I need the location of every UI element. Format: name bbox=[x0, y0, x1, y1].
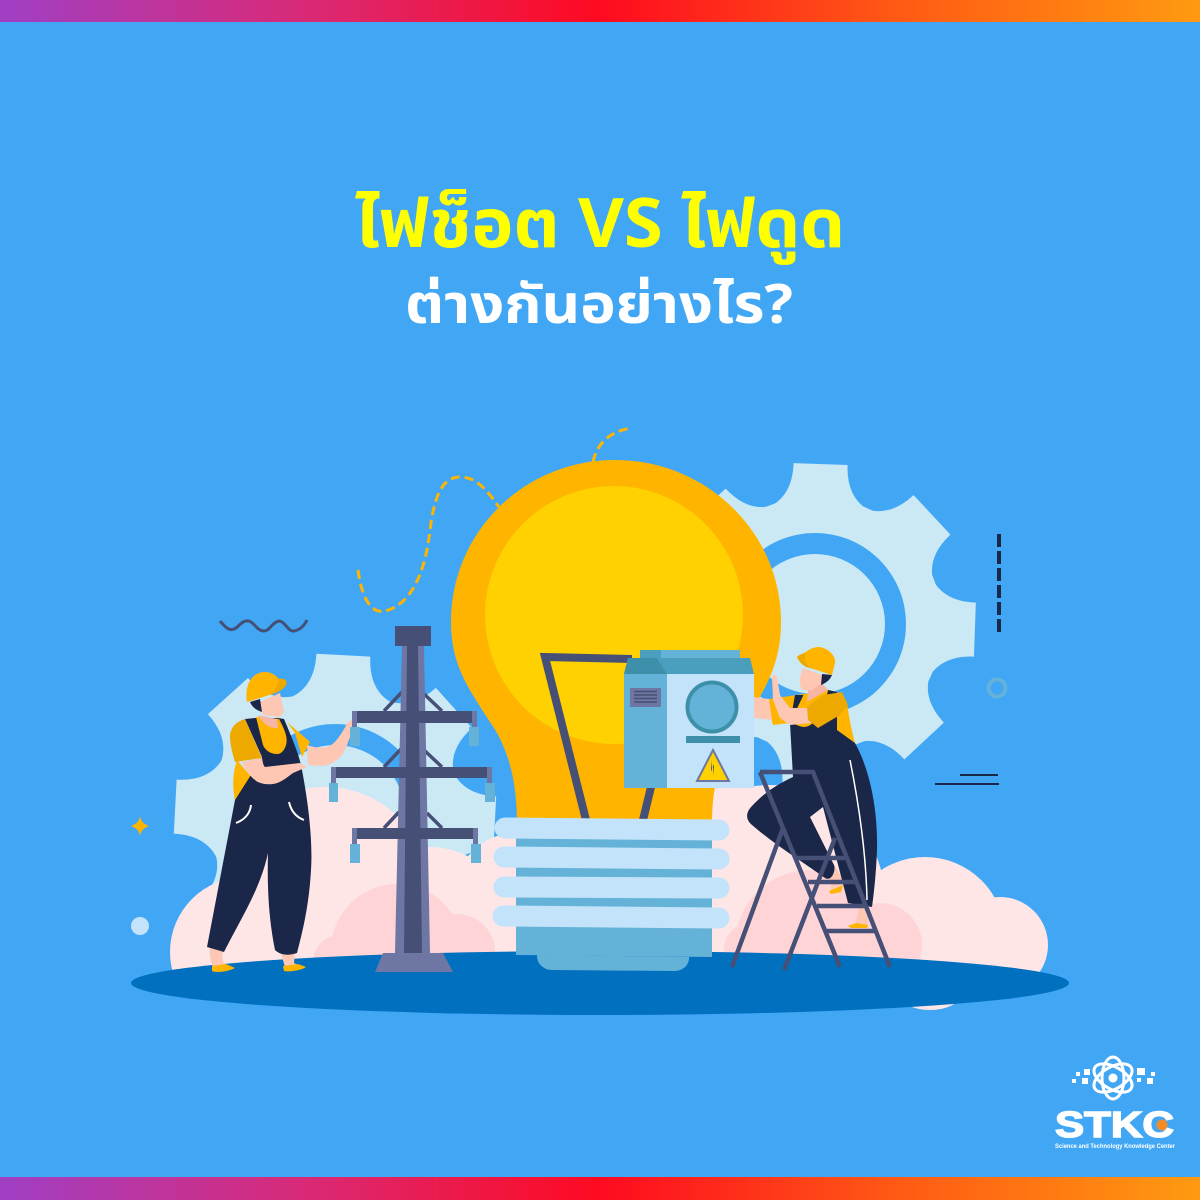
light bulb bbox=[451, 460, 781, 971]
clouds: darker pink bbox=[314, 870, 922, 960]
far arm bbox=[307, 720, 352, 766]
raised forearm bbox=[772, 675, 812, 725]
top gradient bar bbox=[0, 0, 1200, 22]
clouds: light pink bbox=[170, 785, 1048, 1027]
gear: right bbox=[653, 462, 977, 786]
dashed wire left bbox=[358, 477, 499, 611]
small ring bbox=[988, 680, 1006, 696]
sparkle bbox=[131, 816, 149, 836]
logo pixels bbox=[1072, 1068, 1155, 1084]
logo wordmark: STKC bbox=[1055, 1104, 1174, 1145]
electrical box bbox=[624, 650, 754, 788]
shirt chest bbox=[790, 691, 828, 727]
hard hat bbox=[797, 647, 835, 675]
sleeve bbox=[230, 719, 262, 762]
hair bbox=[821, 674, 832, 685]
face bbox=[260, 693, 284, 717]
near forearm bbox=[242, 758, 307, 784]
squiggle bbox=[220, 620, 307, 631]
pockets bbox=[236, 802, 304, 823]
filament bbox=[545, 657, 651, 820]
speed lines bbox=[935, 775, 999, 784]
shirt front bbox=[256, 717, 287, 754]
subtitle: ต่างกันอย่างไร? bbox=[405, 267, 793, 348]
logo tagline: Science and Technology Knowledge Center bbox=[1055, 1144, 1176, 1150]
hard hat bbox=[246, 672, 287, 702]
hair bbox=[250, 699, 262, 712]
legs skin bbox=[210, 945, 300, 967]
ground ellipse bbox=[131, 951, 1069, 1015]
worker left bbox=[207, 672, 352, 972]
neck bbox=[258, 715, 278, 728]
dashed wire top bbox=[593, 428, 631, 462]
right sleeve bbox=[287, 722, 310, 757]
transmission tower bbox=[329, 626, 495, 972]
shirt back bbox=[769, 690, 855, 743]
overalls bbox=[747, 690, 877, 907]
meter dial bbox=[688, 682, 736, 732]
leg stripe bbox=[850, 760, 867, 900]
neck bbox=[807, 683, 828, 702]
ladder bbox=[732, 772, 890, 970]
shoes bbox=[212, 964, 306, 972]
warning triangle bbox=[697, 750, 729, 781]
sleeve bbox=[807, 692, 848, 728]
back foot bbox=[855, 903, 868, 926]
arm to box bbox=[754, 697, 772, 720]
face bbox=[800, 668, 822, 690]
vent bbox=[630, 688, 661, 707]
dashed vertical line bbox=[997, 534, 1001, 635]
logo atom bbox=[1089, 1057, 1137, 1099]
bulb base bbox=[516, 835, 712, 957]
overalls bbox=[207, 718, 311, 955]
gear: left bbox=[172, 652, 498, 978]
worker right bbox=[732, 647, 890, 970]
bottom gradient bar bbox=[0, 1177, 1200, 1200]
title: ไฟช็อต VS ไฟดูด bbox=[355, 175, 845, 278]
logo STKC bbox=[1055, 1057, 1176, 1150]
logo orange dot bbox=[1156, 1120, 1168, 1130]
small dot bbox=[131, 917, 149, 935]
back shirt tail bbox=[233, 760, 252, 801]
front foot bbox=[830, 865, 845, 890]
